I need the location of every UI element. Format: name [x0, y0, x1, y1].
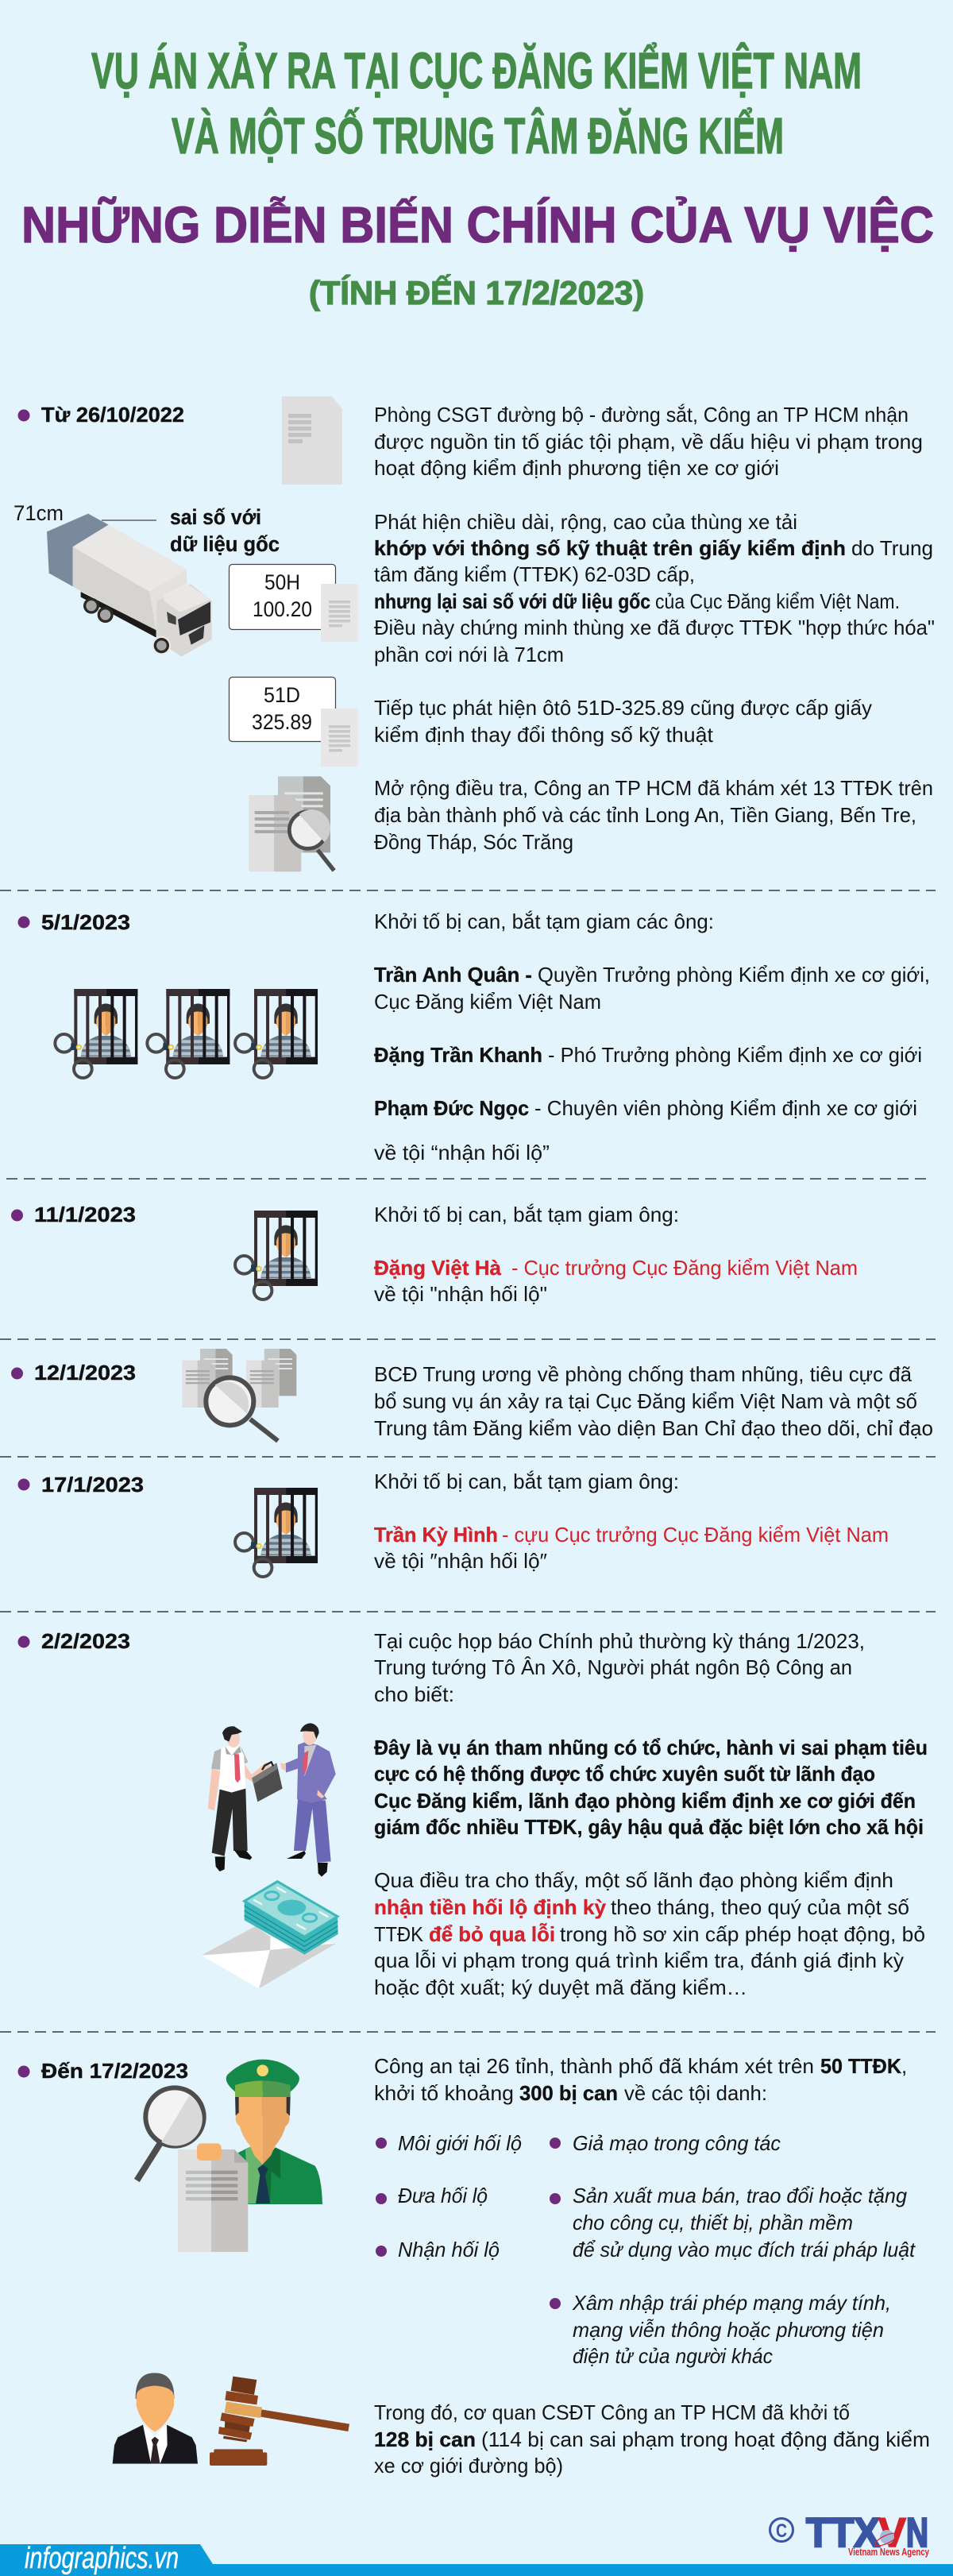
text: inspections and charges: về các tội danh: [624, 2081, 767, 2105]
text: inspections and charges: 50 TTĐK [820, 2054, 901, 2078]
date: 17/1/2023: 17/1/2023 [41, 1473, 144, 1497]
text: HCM police charges: (114 bị can sai phạm trong hoạt động đăng kiểm [481, 2427, 930, 2451]
text: charged officials: Đặng Trần Khanh [374, 1043, 542, 1067]
logo: TTXVN [770, 2510, 929, 2558]
list: charges left column: Nhận hối lộ [398, 2238, 500, 2261]
list: charges right column: Xâm nhập trái phép mạng máy tính, [572, 2291, 891, 2315]
text: inspections and charges: khởi tố khoảng [374, 2081, 514, 2105]
text: investigation findings: trong hồ sơ xin cấp phép hoạt động, bỏ [560, 1922, 925, 1946]
plate: 50H 100.20: 100.20 [253, 597, 312, 621]
text: Tran Ky Hinh: Khởi tố bị can, bắt tạm giam ông: [374, 1470, 679, 1493]
text: inspections and charges: Công an tại 26 tỉnh, thành phố đã khám xét trên [374, 2054, 814, 2078]
icon: three jailed men [55, 989, 318, 1078]
icon: man and gavel [113, 2373, 349, 2466]
text: expanded investigation: Mở rộng điều tra, Công an TP HCM đã khám xét 13 TTĐK trên [374, 776, 933, 800]
text: truck body finding: khớp với thông số kỹ thuật trên giấy kiểm định [374, 536, 846, 560]
list: charges left column: Môi giới hối lộ [398, 2131, 522, 2155]
logo: TTXVN: Vietnam News Agency [848, 2547, 929, 2558]
text: steering committee [374, 1362, 933, 1440]
text: expanded investigation: địa bàn thành phố và các tỉnh Long An, Tiền Giang, Bến Tre, [374, 803, 916, 827]
text: investigation findings [374, 1868, 925, 1999]
date: 5/1/2023: 5/1/2023 [41, 910, 130, 934]
list: charges right column: điện tử của người khác [573, 2344, 773, 2368]
date: 12/1/2023: 12/1/2023 [34, 1361, 136, 1385]
text: Tran Ky Hinh: Trần Kỳ Hình [374, 1523, 498, 1547]
text: press conference: cho biết: [374, 1682, 454, 1706]
text: truck body finding [374, 510, 935, 666]
text: press conference: Trung tướng Tô Ân Xô, Người phát ngôn Bộ Công an [374, 1655, 852, 1679]
text: tip received: hoạt động kiểm định phương tiện xe cơ giới [374, 456, 779, 480]
text: press conference: Tại cuộc họp báo Chính phủ thường kỳ tháng 1/2023, [374, 1629, 865, 1653]
text: tip received: được nguồn tin tố giác tội phạm, về dấu hiệu vi phạm trong [374, 430, 923, 454]
text: investigation findings: để bỏ qua lỗi [429, 1922, 555, 1946]
text: second vehicle: Tiếp tục phát hiện ôtô 51D-325.89 cũng được cấp giấy [374, 696, 872, 720]
text: truck body finding: nhưng lại sai số với dữ liệu gốc [374, 589, 650, 613]
text: press conference [374, 1629, 865, 1706]
footer band [0, 2544, 953, 2576]
logo: TTXVN: C [776, 2520, 787, 2542]
icon: police officer with document [137, 2060, 322, 2252]
text: inspections and charges: 300 bị can [519, 2081, 618, 2105]
text: official statement: cực có hệ thống được tổ chức xuyên suốt từ lãnh đạo [374, 1762, 875, 1786]
text: investigation findings: Qua điều tra cho thấy, một số lãnh đạo phòng kiểm định [374, 1868, 893, 1892]
list: charges right column: mạng viễn thông hoặc phương tiện [573, 2318, 884, 2342]
text: tip received: Phòng CSGT đường bộ - đường sắt, Công an TP HCM nhận [374, 403, 909, 427]
logo: TTXVN: V [878, 2510, 906, 2556]
text: Tran Ky Hinh: - cựu Cục trưởng Cục Đăng kiểm Việt Nam [502, 1523, 889, 1547]
label: 71cm: 71cm [14, 501, 64, 525]
plate: 50H 100.20 [229, 564, 358, 642]
plate: 51D 325.89 [229, 677, 358, 767]
text: charged officials: - Phó Trưởng phòng Kiểm định xe cơ giới [548, 1043, 922, 1067]
label: difference from original data: sai số với [170, 505, 261, 529]
plate: 51D 325.89: 325.89 [252, 710, 312, 734]
icon: documents under magnifier [182, 1349, 296, 1441]
text: Tran Ky Hinh: về tội ″nhận hối lộ″ [374, 1549, 547, 1573]
text: investigation findings: qua lỗi vi phạm trong quá trình kiểm tra, đánh giá định kỳ [374, 1948, 904, 1972]
date: 17/2/2023: Đến 17/2/2023 [41, 2059, 188, 2083]
text: steering committee: bổ sung vụ án xảy ra tại Cục Đăng kiểm Việt Nam và một số [374, 1389, 917, 1413]
text: Dang Viet Ha [374, 1203, 858, 1306]
icon: bribery handover [208, 1723, 336, 1877]
list: charges right column: Giả mạo trong công tác [573, 2131, 781, 2155]
text: investigation findings: TTĐK [374, 1922, 424, 1946]
text: second vehicle: kiểm định thay đổi thông số kỹ thuật [374, 723, 714, 747]
text: charged officials: - Chuyên viên phòng Kiểm định xe cơ giới [534, 1096, 917, 1120]
date: 2/2/2023: 2/2/2023 [41, 1629, 130, 1653]
list: charges right column: cho công cụ, thiết bị, phần mềm [573, 2211, 853, 2234]
label: difference from original data [170, 505, 280, 556]
text: charged officials: Khởi tố bị can, bắt tạm giam các ông: [374, 910, 714, 933]
text: Dang Viet Ha: Khởi tố bị can, bắt tạm giam ông: [374, 1203, 679, 1226]
subtitle: date: (TÍNH ĐẾN 17/2/2023) [309, 274, 644, 311]
title [91, 41, 862, 164]
logo: TTXVN: N [906, 2510, 928, 2556]
date: 11/1/2023: 11/1/2023 [34, 1203, 136, 1226]
text: truck body finding: phần cơi nới là 71cm [374, 643, 564, 666]
icon: truck [47, 514, 212, 657]
list: charges right column: Sản xuất mua bán, trao đổi hoặc tặng [573, 2184, 908, 2207]
icon: documents with magnifier [249, 776, 334, 871]
text: Dang Viet Ha: - Cục trưởng Cục Đăng kiểm Việt Nam [511, 1256, 858, 1280]
footer: site name: infographics.vn [25, 2542, 179, 2575]
label: difference from original data: dữ liệu gốc [170, 532, 280, 556]
text: steering committee: BCĐ Trung ương về phòng chống tham nhũng, tiêu cực đã [374, 1362, 912, 1386]
text: tip received [374, 403, 923, 480]
text: HCM police charges: Trong đó, cơ quan CSĐT Công an TP HCM đã khởi tố [374, 2400, 850, 2424]
list: charges left column [376, 2131, 522, 2261]
text: charged officials: về tội “nhận hối lộ” [374, 1141, 550, 1164]
text: official statement: giám đốc nhiều TTĐK, gây hậu quả đặc biệt lớn cho xã hội [374, 1815, 924, 1839]
text: charged officials: Trần Anh Quân - [374, 963, 532, 987]
icon: jailed man [235, 1211, 318, 1300]
text: truck body finding: Điều này chứng minh thùng xe đã được TTĐK "hợp thức hóa" [374, 616, 935, 639]
icon: money on envelope [201, 1882, 338, 1988]
text: official statement: Đây là vụ án tham nhũng có tổ chức, hành vi sai phạm tiêu [374, 1736, 928, 1759]
list: charges left column: Đưa hối lộ [398, 2184, 488, 2207]
plate: 51D 325.89: 51D [264, 683, 300, 707]
callout line [102, 519, 156, 521]
text: investigation findings: nhận tiền hối lộ định kỳ [374, 1895, 607, 1919]
text: second vehicle [374, 696, 872, 747]
icon: document [282, 396, 342, 485]
list: charges right column [550, 2131, 916, 2368]
plate: 50H 100.20: 50H [264, 570, 300, 594]
text: investigation findings: hoặc đột xuất; ký duyệt mã đăng kiểm… [374, 1975, 747, 1999]
text: charged officials: Quyền Trưởng phòng Kiểm định xe cơ giới, [538, 963, 930, 987]
text: charged officials: Cục Đăng kiểm Việt Nam [374, 990, 601, 1014]
text: Tran Ky Hinh [374, 1470, 889, 1573]
text: expanded investigation: Đồng Tháp, Sóc Trăng [374, 830, 573, 854]
text: official statement [374, 1736, 928, 1839]
text: HCM police charges [374, 2400, 930, 2478]
text: expanded investigation [374, 776, 933, 854]
text: HCM police charges: xe cơ giới đường bộ) [374, 2454, 563, 2478]
text: truck body finding: Phát hiện chiều dài, rộng, cao của thùng xe tải [374, 510, 797, 534]
text: truck body finding: do Trung [851, 536, 933, 560]
text: charged officials: Phạm Đức Ngọc [374, 1096, 529, 1120]
date: 26/10/2022: Từ 26/10/2022 [41, 403, 184, 427]
text: inspections and charges: , [901, 2054, 907, 2078]
text: Dang Viet Ha: Đặng Việt Hà [374, 1256, 502, 1280]
text: investigation findings: theo tháng, theo quý của một số [611, 1895, 909, 1919]
text: truck body finding: của Cục Đăng kiểm Việt Nam. [655, 589, 900, 613]
text: HCM police charges: 128 bị can [374, 2427, 476, 2451]
logo: TTXVN: TTX [806, 2510, 880, 2556]
icon: jailed man [235, 1488, 318, 1577]
text: Dang Viet Ha: về tội "nhận hối lộ" [374, 1282, 547, 1306]
text: inspections and charges [374, 2054, 907, 2105]
text: steering committee: Trung tâm Đăng kiểm vào diện Ban Chỉ đạo theo dõi, chỉ đạo [374, 1416, 933, 1440]
text: truck body finding: tâm đăng kiểm (TTĐK) 62-03D cấp, [374, 562, 695, 586]
list: charges right column: để sử dụng vào mục đích trái pháp luật [573, 2238, 916, 2261]
text: official statement: Cục Đăng kiểm, lãnh đạo phòng kiểm định xe cơ giới đến [374, 1789, 916, 1813]
text: charged officials [374, 910, 930, 1164]
